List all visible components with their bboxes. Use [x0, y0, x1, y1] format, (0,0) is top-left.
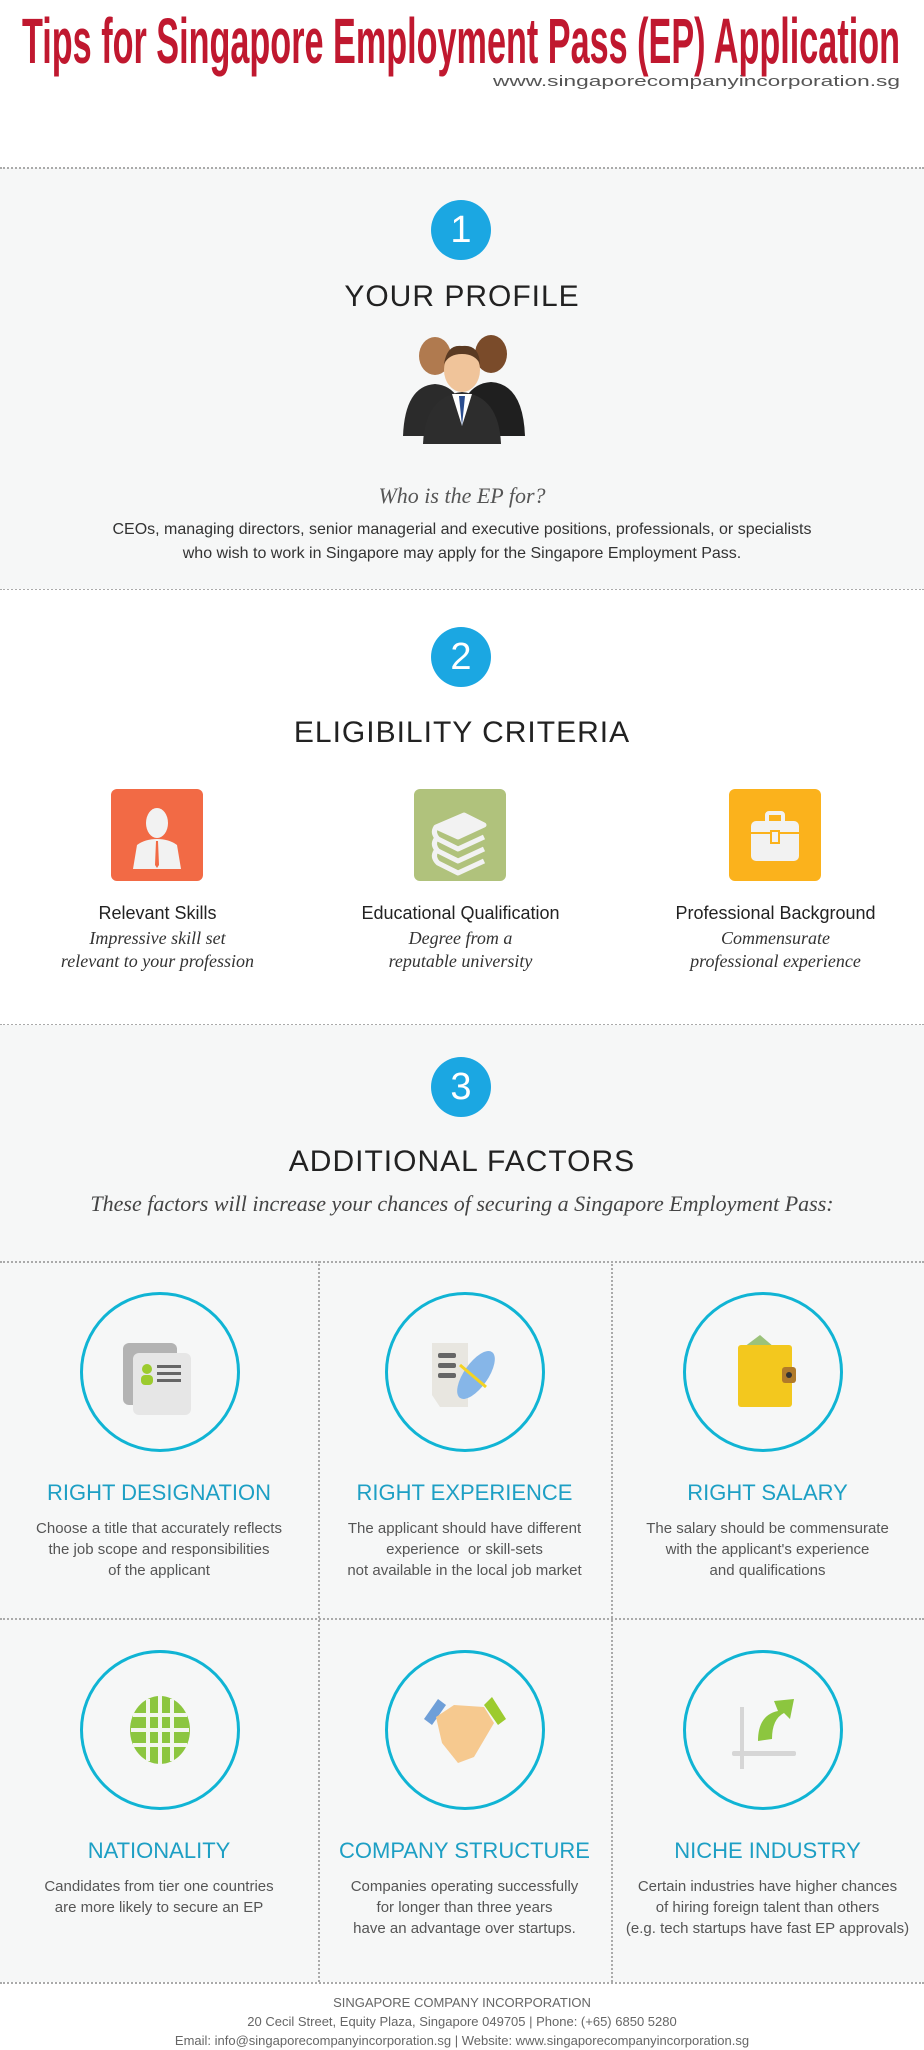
criterion: relevant skills: relevant to your profession [61, 951, 254, 971]
icon: growth arrow [683, 1650, 843, 1810]
heading: additional factors: ADDITIONAL FACTORS [289, 1145, 635, 1178]
icon: globe [80, 1650, 240, 1810]
criterion: professional background: Commensurate [721, 928, 830, 948]
criterion: educational qualification: Educational Qualification [361, 903, 560, 923]
text: description: CEOs, managing directors, senior managerial and executive positions, professionals, or specialists [112, 521, 812, 538]
criterion: relevant skills: Relevant Skills [98, 903, 217, 923]
heading: eligibility criteria: ELIGIBILITY CRITERIA [294, 716, 630, 749]
subheading: who is the EP for: Who is the EP for? [378, 483, 546, 508]
text: description: who wish to work in Singapore may apply for the Singapore Employment Pass. [183, 545, 741, 562]
footer: SINGAPORE COMPANY INCORPORATION [333, 1995, 591, 2010]
factor: right salary: and qualifications [710, 1562, 825, 1579]
footer: Email: info@singaporecompanyincorporation.sg | Website: www.singaporecompanyincorporation.sg [175, 2033, 749, 2048]
text: intro: These factors will increase your chances of securing a Singapore Employment Pass: [90, 1191, 834, 1216]
number badge 1: 1 [450, 209, 472, 251]
factor: right designation [36, 1292, 282, 1579]
icon: books [414, 789, 506, 881]
criterion: professional background: Professional Background [675, 903, 876, 923]
website url: www.singaporecompanyincorporation.sg [491, 73, 900, 90]
criterion: educational qualification [361, 789, 560, 971]
icon: business people [403, 335, 525, 444]
factor: niche industry: NICHE INDUSTRY [674, 1838, 861, 1863]
factor: right experience [347, 1292, 582, 1579]
factor: right experience: The applicant should have different [348, 1520, 581, 1537]
factor: right salary [646, 1292, 889, 1579]
factor: right designation: of the applicant [108, 1562, 210, 1579]
text: description [112, 521, 812, 562]
factor: nationality: Candidates from tier one countries [44, 1878, 274, 1895]
footer: 20 Cecil Street, Equity Plaza, Singapore 049705 | Phone: (+65) 6850 5280 [247, 2014, 677, 2029]
factor: right salary: with the applicant's experience [666, 1541, 869, 1558]
factor: right designation: Choose a title that accurately reflects [36, 1520, 282, 1537]
factor: right designation: RIGHT DESIGNATION [47, 1480, 271, 1505]
factor: right experience: not available in the local job market [347, 1562, 582, 1579]
factor: nationality: are more likely to secure an EP [55, 1899, 263, 1916]
icon: handshake [385, 1650, 545, 1810]
factor: company structure: COMPANY STRUCTURE [339, 1838, 590, 1863]
factor: right experience: experience or skill-sets [386, 1541, 543, 1558]
criterion: educational qualification: reputable university [389, 951, 532, 971]
factor: niche industry: (e.g. tech startups have fast EP approvals) [626, 1920, 909, 1937]
factor: niche industry: of hiring foreign talent than others [656, 1899, 879, 1916]
number badge 2: 2 [450, 636, 472, 678]
panel: your profile [0, 168, 924, 589]
factor: right salary: The salary should be commensurate [646, 1520, 889, 1537]
factor: nationality [44, 1650, 274, 1916]
number badge 2 [431, 627, 491, 687]
criterion: relevant skills: Impressive skill set [89, 928, 226, 948]
criterion: professional background: professional experience [690, 951, 861, 971]
factor: niche industry: Certain industries have higher chances [638, 1878, 897, 1895]
footer [175, 1995, 749, 2048]
factor: company structure: have an advantage over startups. [353, 1920, 576, 1937]
panel: additional factors [0, 1025, 924, 1982]
icon: wallet [683, 1292, 843, 1452]
factor: right designation: the job scope and responsibilities [48, 1541, 269, 1558]
factor: company structure: for longer than three years [377, 1899, 552, 1916]
criterion: professional background [675, 789, 876, 971]
factor: niche industry [626, 1650, 909, 1937]
panel: eligibility criteria [0, 590, 924, 1024]
criterion: relevant skills [61, 789, 254, 971]
number badge 3: 3 [450, 1066, 472, 1108]
factor: right salary: RIGHT SALARY [687, 1480, 848, 1505]
factor: company structure [339, 1650, 590, 1937]
factor: nationality: NATIONALITY [88, 1838, 230, 1863]
number badge 3 [431, 1057, 491, 1117]
heading: your profile: YOUR PROFILE [344, 280, 580, 313]
icon: paper and pen [385, 1292, 545, 1452]
factor: company structure: Companies operating successfully [351, 1878, 578, 1895]
icon: id card [80, 1292, 240, 1452]
icon: person [111, 789, 203, 881]
criterion: educational qualification: Degree from a [409, 928, 512, 948]
number badge 1 [431, 200, 491, 260]
factor: right experience: RIGHT EXPERIENCE [356, 1480, 572, 1505]
icon: briefcase [729, 789, 821, 881]
